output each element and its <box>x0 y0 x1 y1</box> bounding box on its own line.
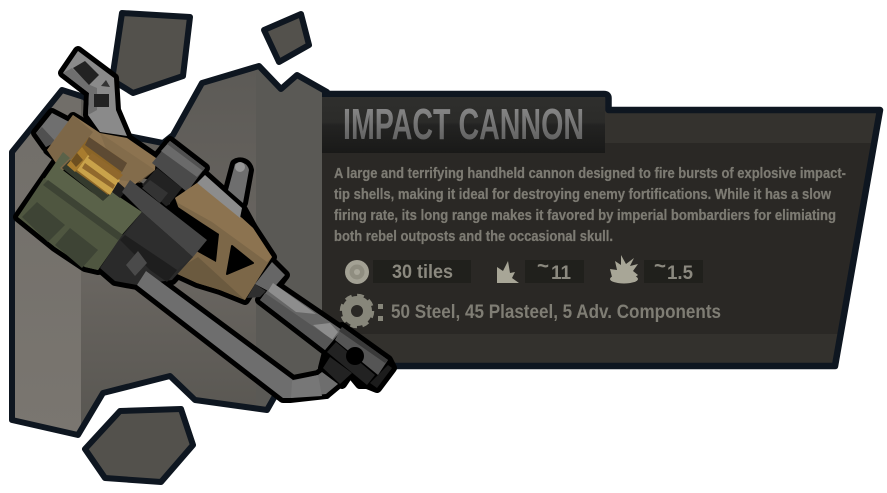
icon: gear <box>342 296 372 326</box>
tan stock <box>47 115 156 200</box>
icon: small burst <box>497 261 519 283</box>
icon: large explosion <box>610 255 638 284</box>
cost text: 50 Steel, 45 Plasteel, 5 Adv. Components <box>391 302 721 323</box>
gun silhouette outline <box>18 51 392 398</box>
rear stub <box>36 113 75 147</box>
rock fragment: bottom <box>85 409 193 482</box>
description <box>334 165 846 245</box>
muzzle <box>323 327 392 388</box>
cannon <box>18 51 392 398</box>
stat: range <box>373 260 471 283</box>
front post <box>228 162 249 203</box>
rock backdrop <box>9 60 327 440</box>
receiver <box>100 180 207 285</box>
icon: rear sight <box>63 51 127 136</box>
green magazine housing <box>18 152 142 270</box>
stat: blast radius: ~ <box>654 253 666 278</box>
title tab <box>322 97 605 153</box>
tan forend <box>150 183 272 300</box>
ammo window <box>62 137 127 201</box>
stat: blast radius: 1.5 <box>667 263 693 284</box>
barrel <box>260 283 342 350</box>
stat: range: 30 tiles <box>392 262 453 283</box>
scope block <box>152 141 205 192</box>
top rail <box>197 175 242 218</box>
stat: damage: 11 <box>551 263 571 284</box>
title: IMPACT CANNON <box>343 100 584 149</box>
rock fragment: right <box>264 14 309 62</box>
icon: range target <box>345 260 369 284</box>
description: both rebel outposts and the occasional skull. <box>334 228 613 245</box>
info panel <box>322 90 887 366</box>
stat: blast radius <box>644 253 703 284</box>
stat: damage <box>525 253 584 284</box>
scope mount <box>142 168 182 207</box>
barrel collar <box>247 262 285 298</box>
lower rail <box>137 271 338 398</box>
colon <box>378 304 383 321</box>
stat: damage: ~ <box>537 253 549 278</box>
rock fragment: top <box>112 13 190 93</box>
